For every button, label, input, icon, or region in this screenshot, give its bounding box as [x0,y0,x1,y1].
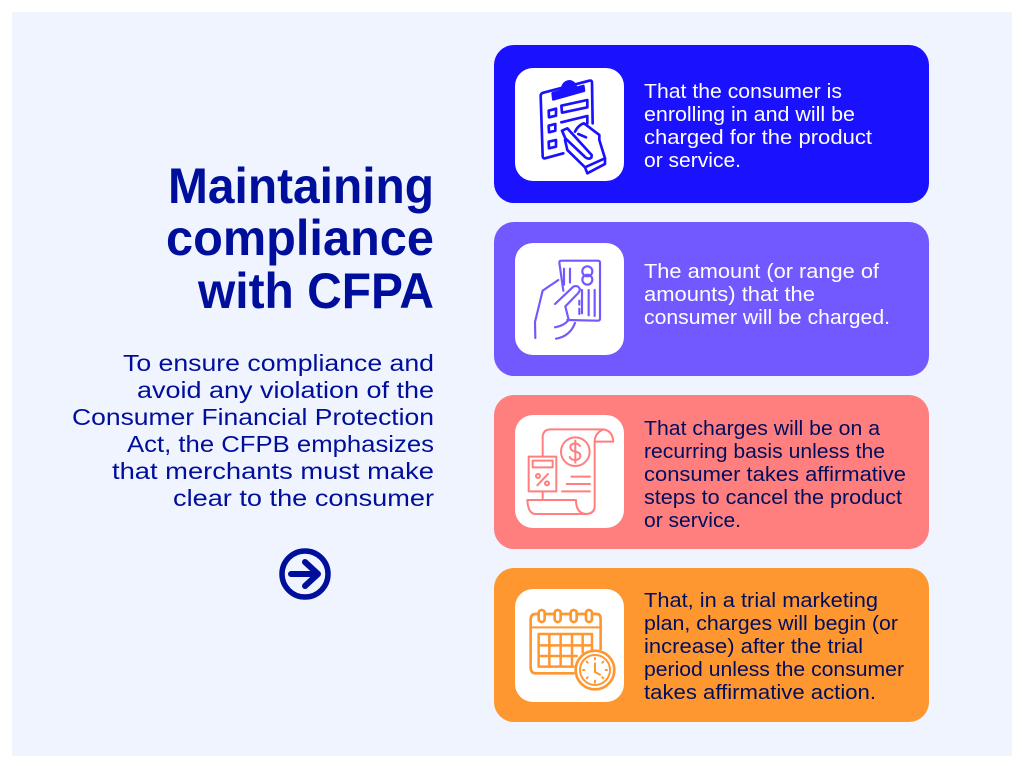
card 3 text [644,417,906,532]
card 2 text [644,260,890,329]
card 4 text [644,589,904,704]
card 3 text: recurring basis unless the [644,440,885,463]
card 2 text: The amount (or range of [644,260,879,283]
icon: invoice with calculator [515,415,624,528]
card 4 text: That, in a trial marketing [644,589,878,612]
card 4 text: period unless the consumer [644,658,904,681]
card 1 text: charged for the product [644,126,872,149]
intro text block: To ensure compliance and [123,350,434,376]
intro text block: clear to the consumer [173,485,434,511]
title: Maintaining [168,158,434,214]
card 3 text: steps to cancel the product [644,486,902,509]
card 2 text: amounts) that the [644,283,815,306]
icon: hand holding credit card [515,243,624,355]
intro text block: Consumer Financial Protection [72,404,434,430]
intro text block [72,350,434,511]
intro text block: Act, the CFPB emphasizes [127,431,434,457]
panel: card 1 [494,45,929,203]
title: compliance [166,210,434,266]
card 1 text [644,80,872,172]
card 1 text: That the consumer is [644,80,842,103]
intro text block: that merchants must make [112,458,434,484]
title [166,158,434,319]
card 3 text: consumer takes affirmative [644,463,906,486]
card 1 text: or service. [644,149,741,172]
panel: card 4 [494,568,929,722]
card 4 text: takes affirmative action. [644,681,876,704]
card 2 text: consumer will be charged. [644,306,890,329]
card 3 text: or service. [644,509,741,532]
card 4 text: plan, charges will begin (or [644,612,898,635]
icon: clipboard with hand writing [515,68,624,181]
icon: arrow in circle [282,551,328,597]
card 3 text: That charges will be on a [644,417,881,440]
title: with CFPA [197,263,434,319]
card 1 text: enrolling in and will be [644,103,855,126]
panel: card 2 [494,222,929,376]
panel: card 3 [494,395,929,549]
icon: calendar with clock [515,589,624,702]
card 4 text: increase) after the trial [644,635,863,658]
intro text block: avoid any violation of the [137,377,434,403]
